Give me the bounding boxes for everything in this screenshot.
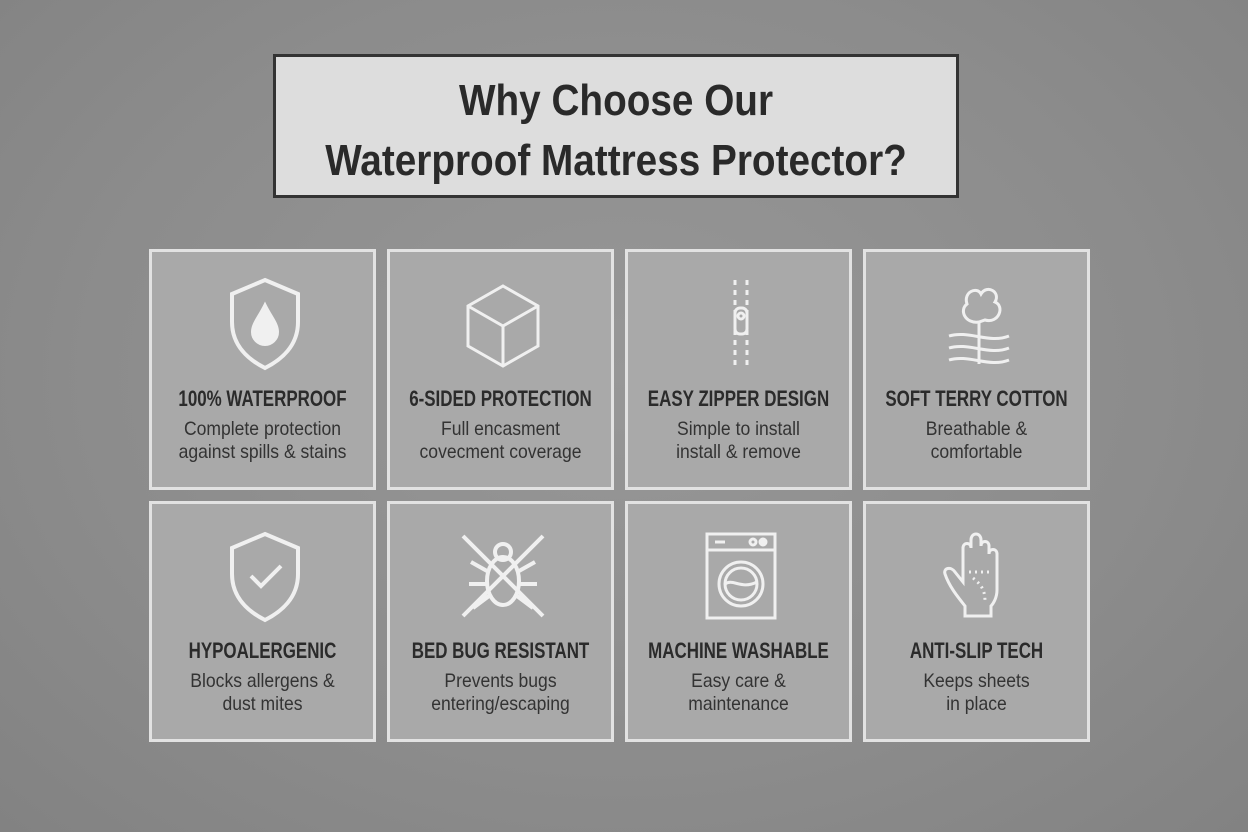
panel: anti-slip (863, 501, 1090, 742)
text (676, 418, 801, 463)
text: Simple to install (677, 418, 800, 440)
title (273, 54, 959, 198)
heading: SOFT TERRY COTTON (885, 386, 1068, 411)
text (923, 670, 1030, 715)
text: Breathable & (926, 418, 1027, 440)
text: maintenance (688, 693, 789, 715)
text: Complete protection (184, 418, 341, 440)
title: Waterproof Mattress Protector? (325, 136, 907, 185)
text (179, 418, 346, 463)
icon: shield drop (230, 278, 300, 370)
text: covecment coverage (420, 441, 581, 463)
icon: zipper (734, 280, 748, 365)
panel: washable (625, 501, 852, 742)
icon: cube (466, 284, 540, 368)
text: Full encasment (441, 418, 560, 440)
heading: HYPOALERGENIC (189, 638, 336, 663)
title: Why Choose Our (459, 76, 773, 125)
text: dust mites (223, 693, 302, 715)
text: in place (946, 693, 1007, 715)
heading: BED BUG RESISTANT (412, 638, 589, 663)
heading: ANTI-SLIP TECH (910, 638, 1043, 663)
text (431, 670, 570, 715)
text: comfortable (931, 441, 1022, 463)
heading: MACHINE WASHABLE (648, 638, 829, 663)
text: Keeps sheets (923, 670, 1030, 692)
icon: shield check (230, 532, 300, 622)
panel: waterproof (149, 249, 376, 490)
text: against spills & stains (179, 441, 346, 463)
text (926, 418, 1027, 463)
text: entering/escaping (431, 693, 570, 715)
text (688, 670, 789, 715)
text: install & remove (676, 441, 801, 463)
panel: hypoallergenic (149, 501, 376, 742)
text: Easy care & (691, 670, 786, 692)
icon: crossed bug (462, 534, 544, 618)
panel: 6-sided (387, 249, 614, 490)
text: Prevents bugs (444, 670, 557, 692)
text (190, 670, 335, 715)
panel: bed bug (387, 501, 614, 742)
text (420, 418, 581, 463)
icon: hand (943, 532, 998, 618)
panel: zipper (625, 249, 852, 490)
panel: cotton (863, 249, 1090, 490)
icon: cotton (948, 288, 1010, 364)
text: Blocks allergens & (190, 670, 335, 692)
icon: washing machine (706, 532, 776, 620)
heading: 6-SIDED PROTECTION (409, 386, 592, 411)
heading: EASY ZIPPER DESIGN (648, 386, 829, 411)
heading: 100% WATERPROOF (178, 386, 347, 411)
